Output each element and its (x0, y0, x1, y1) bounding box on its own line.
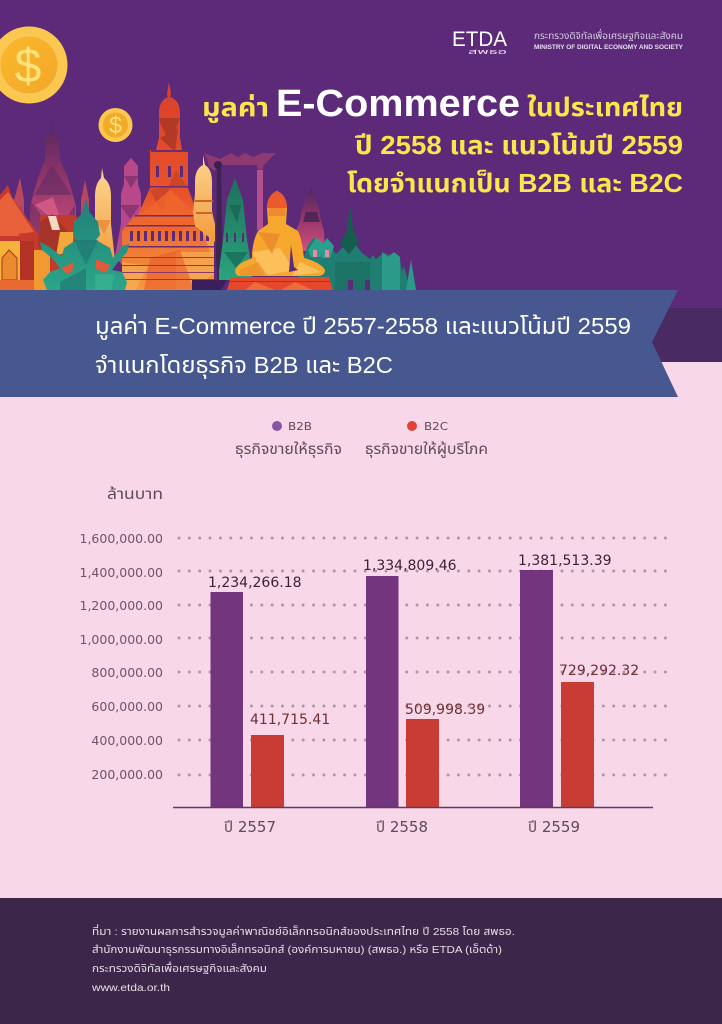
Buddha pedestal (227, 277, 333, 290)
banner heading (95, 313, 631, 379)
title: ในประเทศไทย (527, 92, 683, 122)
central Wat Arun prang (120, 80, 220, 292)
bottom dark patch (192, 280, 227, 290)
y axis labels: 400,000.00 (91, 733, 163, 748)
ministry name (534, 28, 684, 51)
ministry name: MINISTRY OF DIGITAL ECONOMY AND SOCIETY (534, 44, 684, 51)
value labels: 509,998.39 (405, 702, 485, 718)
y axis labels: 1,400,000.00 (80, 565, 163, 580)
title: มูลค่า (202, 92, 269, 123)
legend item: B2C: ธุรกิจขายให้ผู้บริโภค (365, 441, 488, 458)
value labels: 1,234,266.18 (208, 575, 302, 591)
x axis labels: ปี 2559 (528, 818, 580, 836)
source text: กระทรวงดิจิทัลเพื่อเศรษฐกิจและสังคม (92, 961, 267, 975)
value labels: 1,334,809.46 (363, 558, 457, 574)
y axis labels: 800,000.00 (91, 665, 163, 680)
source text: ที่มา : รายงานผลการสำรวจมูลค่าพาณิชย์อิเล็กทรอนิกส์ของประเทศไทย ปี 2558 โดย สพธอ. (92, 924, 515, 938)
green prang (219, 178, 252, 280)
bars 2559 (520, 570, 594, 807)
title (202, 83, 683, 198)
small spires (14, 178, 89, 220)
bars 2558 (366, 576, 439, 807)
left magenta prang (30, 117, 76, 246)
title: E-Commerce (276, 83, 520, 125)
legend item: B2B: B2B (288, 420, 312, 433)
value labels: 411,715.41 (250, 712, 330, 728)
y axis labels: 1,000,000.00 (80, 632, 163, 647)
background: purple header (0, 0, 722, 310)
title: ปี 2558 และ แนวโน้มปี 2559 (355, 130, 683, 160)
logo: ETDA: สพธอ (468, 49, 507, 56)
legend item: B2B: ธุรกิจขายให้ธุรกิจ (235, 441, 342, 458)
right peach prang (193, 155, 215, 242)
swing gate (204, 153, 276, 288)
y axis labels: 1,200,000.00 (80, 598, 163, 613)
y axis labels: 1,600,000.00 (80, 531, 163, 546)
value labels (208, 553, 639, 728)
source text (91, 924, 515, 994)
x axis labels: ปี 2557 (224, 818, 276, 836)
legend item: B2C (365, 420, 488, 458)
y axis labels: 600,000.00 (91, 699, 163, 714)
source text: www.etda.or.th (91, 982, 170, 994)
icon: small gold coin: $ (109, 112, 122, 138)
baseline (173, 806, 653, 808)
Buddha statue (235, 191, 325, 276)
icon: small gold coin (98, 108, 132, 142)
icon: large gold coin (0, 26, 68, 104)
x axis labels (224, 818, 580, 836)
bar chart (80, 531, 668, 836)
value labels: 1,381,513.39 (518, 553, 612, 569)
value labels: 729,292.32 (559, 663, 639, 679)
y axis labels: 200,000.00 (91, 767, 163, 782)
left pavilion (0, 185, 84, 290)
left peach prang (93, 168, 115, 268)
legend item: B2C: B2C (424, 420, 448, 433)
background: dark ribbon fold (600, 308, 722, 362)
title: โดยจำแนกเป็น B2B และ B2C (347, 168, 683, 198)
y axis labels (80, 531, 163, 782)
small magenta prang (115, 158, 145, 266)
teal temples group (298, 205, 416, 297)
bars 2557 (210, 592, 284, 807)
banner heading: จำแนกโดยธุรกิจ B2B และ B2C (95, 352, 393, 379)
legend (235, 420, 488, 458)
ribbon banner (0, 290, 678, 397)
logo: ETDA: ETDA (452, 28, 507, 51)
icon: large gold coin: $ (15, 40, 41, 93)
axis unit label: ล้านบาท (107, 486, 163, 503)
background: pink chart area (0, 362, 722, 898)
illustration: Thai temples skyline (0, 80, 416, 297)
source text: สำนักงานพัฒนาธุรกรรมทางอิเล็กทรอนิกส์ (องค์การมหาชน) (สพธอ.) หรือ ETDA (เอ็ตด้า) (92, 943, 502, 956)
right dark prang (295, 187, 325, 251)
legend item: B2B (235, 420, 342, 458)
x axis labels: ปี 2558 (376, 818, 428, 836)
ministry name: กระทรวงดิจิทัลเพื่อเศรษฐกิจและสังคม (534, 28, 683, 42)
footer panel (0, 898, 722, 1024)
teal giant guardian figure (40, 199, 129, 290)
banner heading: มูลค่า E-Commerce ปี 2557-2558 และแนวโน้มปี 2559 (95, 313, 631, 341)
